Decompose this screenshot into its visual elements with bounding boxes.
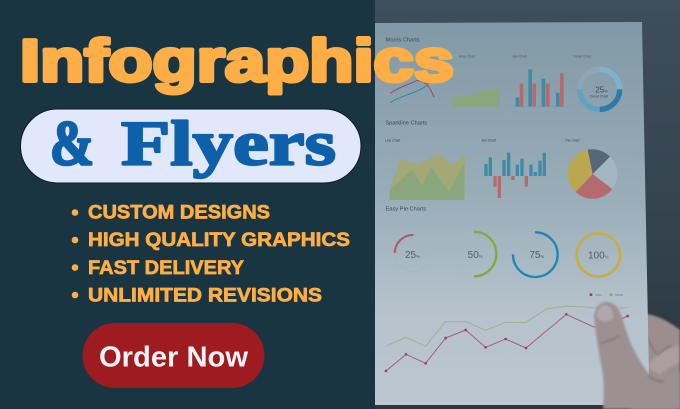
heading: Sparkline Charts: Sparkline Charts	[385, 121, 427, 127]
pie gauge 100%	[577, 233, 620, 277]
bullet 2: HIGH QUALITY GRAPHICS	[88, 230, 350, 251]
upper charts	[385, 38, 620, 200]
bullet 3: FAST DELIVERY	[88, 258, 244, 279]
heading: Easy Pie Charts: Easy Pie Charts	[386, 207, 426, 213]
donut chart 25%: Donut Chart	[573, 54, 591, 58]
button: Order Now	[82, 323, 264, 388]
sparkline bar chart	[482, 139, 546, 198]
pie chart: Pie Chart	[566, 139, 580, 143]
line chart	[385, 293, 629, 372]
pie chart	[566, 139, 617, 199]
sparkline area chart	[385, 139, 465, 200]
icon: thumb over the paper	[594, 302, 680, 409]
pie gauge 100%: 100%	[588, 251, 609, 262]
feature list	[72, 202, 350, 306]
title: Infographics	[20, 28, 454, 94]
lower charts	[385, 207, 629, 372]
bar chart: Bar Chart	[513, 55, 527, 59]
pie gauge 25%: 25%	[405, 250, 420, 261]
subtitle word: Flyers	[121, 108, 336, 178]
donut chart 25%: Donut Chart	[590, 94, 608, 98]
pie gauge 75%: 75%	[529, 250, 544, 261]
pie gauge 25%	[394, 235, 431, 271]
heading: Morris Charts: Morris Charts	[386, 38, 420, 44]
morris area chart: Area Chart	[459, 55, 475, 59]
left panel background	[0, 0, 375, 409]
pill: & Flyers	[20, 108, 361, 183]
morris area chart	[452, 55, 500, 107]
donut chart 25%: 25%	[595, 86, 608, 95]
pill background	[20, 109, 361, 183]
hand palm behind the paper	[630, 314, 680, 409]
bullet 4: UNLIMITED REVISIONS	[88, 286, 322, 306]
donut chart 25%	[573, 54, 620, 109]
bullet 1: CUSTOM DESIGNS	[88, 202, 270, 224]
pie gauge 75%	[513, 232, 558, 277]
sparkline bar chart: Bar Chart	[482, 139, 496, 143]
pie gauge 50%	[452, 232, 496, 276]
photo background	[375, 0, 680, 409]
button background	[82, 323, 264, 388]
bar chart	[513, 55, 565, 107]
button label: Order Now	[99, 342, 248, 374]
subtitle ampersand: &	[50, 108, 94, 178]
sheet of paper	[375, 22, 649, 405]
sparkline area chart: Line Chart	[385, 139, 400, 143]
morris line chart	[390, 81, 434, 103]
photo panel: paper with charts held by a hand	[375, 0, 680, 409]
pie gauge 50%: 50%	[468, 250, 483, 261]
